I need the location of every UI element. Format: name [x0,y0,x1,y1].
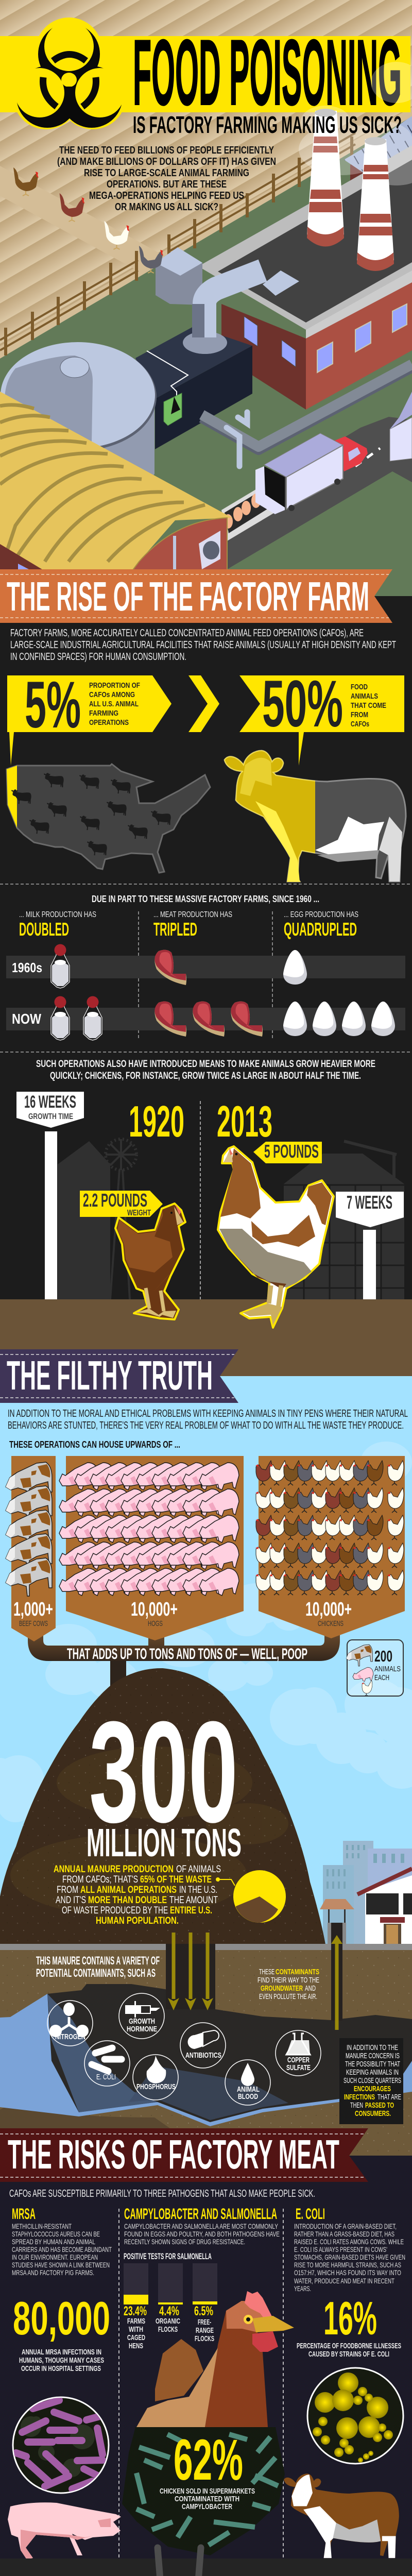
text: annual manure production: 65% OF THE WASTE [140,1874,212,1885]
text: these operations: THESE OPERATIONS CAN HOUSE UPWARDS OF ... [9,1439,180,1450]
bar chart: positive tests for salmonella: FLOCKS [158,2325,178,2334]
bar chart: positive tests for salmonella: 6.5% [194,2304,213,2318]
callout: 50 percent: THAT COME [351,701,386,710]
callout: 50 percent: 50% [262,667,343,741]
column: MRSA: 80,000 [13,2293,110,2345]
smokestack two [357,137,394,271]
icon: e. coli: E. COLI [96,2073,116,2081]
bar chart: positive tests for salmonella: FLOCKS [195,2334,214,2343]
text: annual manure production: ENTIRE U.S. [170,1905,212,1916]
section background: risks [0,2156,412,2576]
text: groundwater note: FIND THEIR WAY TO THE [258,1976,319,1985]
icon: antibiotics: ANTIBIOTICS [185,2051,221,2060]
intro text: RISE TO LARGE-SCALE ANIMAL FARMING [84,167,249,179]
text: 62 percent stat [160,2428,255,2511]
icon: nitrogen: NITROGEN [55,2032,85,2041]
panel: chickens: 10,000+ [305,1599,352,1620]
barn end wall [131,518,227,572]
yellow arch roof [0,392,232,572]
illustration: hen with campylobacter [136,2291,294,2427]
microscope: MRSA bacteria [13,2397,109,2493]
bar chart: positive tests for salmonella: HENS [129,2342,143,2350]
sky bokeh [0,1442,412,1822]
heading: years [129,1097,272,1146]
icon: phosphorus [133,2055,178,2100]
tag: 2.2 pounds weight: 2.2 POUNDS [83,1190,147,1211]
legend: 200 animals each: 200 [374,1647,392,1665]
bar chart: positive tests for salmonella: POSITIVE TESTS FOR SALMONELLA [124,2251,212,2261]
column: MRSA [12,2206,112,2373]
bar chart: positive tests for salmonella: 4.4% [159,2304,179,2318]
column: e. coli: E. COLI [296,2206,325,2223]
text: annual manure production: AND IT'S [56,1895,86,1906]
sign: 16 weeks growth time: GROWTH TIME [28,1112,73,1121]
text: annual manure production: THE AMOUNT [169,1895,218,1906]
text: annual manure production: OF WASTE PRODUCED BY THE [62,1905,168,1916]
intro text [57,145,276,213]
icon: growth hormone [119,1993,164,2039]
sign: 16 weeks growth time [16,1092,84,1299]
text: annual manure production [54,1864,221,1926]
text: annual manure production: OF ANIMALS [176,1864,221,1875]
callout: infection note [339,2038,403,2124]
illustration: large 2013 chicken [218,1146,334,1328]
illustration: well [320,1899,354,1944]
rear barn [350,129,412,258]
text: groundwater note: GROUNDWATER [261,1984,303,1993]
microscope: e. coli [307,2368,403,2464]
factory walls [306,281,412,410]
panel: chickens: CHICKENS [318,1619,344,1628]
stat: 300 million tons: 300 [89,1692,238,1853]
tag: 5 pounds: 5 POUNDS [264,1141,319,1162]
panel: hogs: HOGS [148,1619,163,1628]
chart: production pictograms: NOW [12,1011,41,1027]
intro text: OPERATIONS. BUT ARE THESE [107,179,227,190]
text: groundwater note: AND [305,1984,316,1993]
column: e. coli: YEARS. [294,2284,311,2293]
callout: 50 percent [239,667,404,766]
arrow: chevron [188,675,219,732]
banner: the filthy truth: THE FILTHY TRUTH [7,1352,213,1398]
callout: 50 percent: FROM [351,710,368,719]
sign: 16 weeks growth time: 16 WEEKS [24,1092,76,1112]
dashed column dividers [119,2209,283,2558]
icon: phosphorus: PHOSPHORUS [136,2082,176,2091]
icon: nitrogen [47,2001,93,2046]
icon: growth hormone: HORMONE [127,2025,157,2033]
text: filthy truth intro [8,1408,408,1431]
pipes: waste flow [28,1633,340,1689]
dashed divider 1920 vs 2013 [200,1101,201,1320]
tag: 2.2 pounds weight [80,1190,163,1217]
callout: 5 percent: OPERATIONS [89,718,129,727]
legend: 200 animals each [346,1640,403,1696]
callout: 5 percent: CAFOs AMONG [89,690,135,699]
text: 62 percent stat: CONTAMINATED WITH [175,2495,239,2503]
icon: antibiotics [180,2023,226,2068]
illustration: factory farm top [0,62,412,572]
map: United States with cows [7,764,210,873]
water table [0,1994,412,2126]
chart: production pictograms: QUADRUPLED [284,919,357,940]
delivery truck red [335,436,368,471]
callout: infection note: PASSED TO [365,2101,394,2110]
callout: 5 percent [7,668,171,766]
heading: years: 2013 [217,1097,272,1146]
icon: e. coli [84,2041,130,2086]
conveyor with packaged chickens [221,479,283,541]
tag: 5 pounds [253,1141,322,1163]
icon: copper sulfate: SULFATE [286,2063,311,2072]
icon: biohazard symbol [13,18,126,129]
chart: 65 percent pie [216,1870,286,1923]
column: MRSA: CARRIERS AND HAS BECOME ABUNDANT [12,2245,112,2253]
bar chart: positive tests for salmonella: RANGE [196,2326,214,2335]
silver pipe [183,331,227,354]
intro text: THE NEED TO FEED BILLIONS OF PEOPLE EFFICIENTLY [59,145,274,156]
panel: beef cows: BEEF COWS [19,1619,48,1628]
bar chart: positive tests for salmonella: FREE- [198,2318,211,2327]
column: MRSA: STAPHYLOCOCCUS AUREUS CAN BE [12,2230,100,2238]
illustration: pig [8,2502,121,2560]
stat: 300 million tons [87,1692,242,1865]
text: manure contaminants: THIS MANURE CONTAINS A VARIETY OF [36,1954,160,1967]
sign: 7 weeks [336,1192,404,1299]
text: CAFO definition: IN CONFINED SPACES) FOR HUMAN CONSUMPTION. [10,651,186,663]
text: CAFO definition [10,628,396,663]
second truck [390,417,412,461]
illustration: half yellow cow [225,751,406,882]
text: 62 percent stat: 62% [174,2428,243,2492]
column: MRSA: SPREAD BY HUMAN AND ANIMAL [12,2238,95,2246]
panel: hogs: 10,000+ [131,1599,178,1620]
background: farm ground [0,0,412,596]
callout: 50 percent: CAFOs [351,720,369,728]
text: annual manure production: IN THE U.S. [179,1885,217,1895]
callout: infection note: THEN [350,2101,363,2110]
section: soil [0,1944,412,2156]
panel: beef cows: 1,000+ [13,1599,53,1620]
callout: 5 percent: 5% [25,668,81,742]
chart: production pictograms: ... MILK PRODUCTION HAS [19,910,96,919]
intro text: (AND MAKE BILLIONS OF DOLLARS OFF IT) HAS GIVEN [57,156,276,167]
column: MRSA: HUMANS, THOUGH MANY CASES [19,2356,104,2365]
intro text: MEGA-OPERATIONS HELPING FEED US [89,190,244,201]
callout: 50 percent: ANIMALS [351,692,378,701]
tag: 2.2 pounds weight: WEIGHT [127,1209,151,1217]
illustration: cow [284,2473,399,2558]
text: annual manure production: ALL ANIMAL OPERATIONS [80,1885,177,1895]
callout: infection note: ENCOURAGES [354,2084,391,2093]
bar chart: positive tests for salmonella: ORGANIC [156,2317,180,2326]
chart: production pictograms: ... MEAT PRODUCTION HAS [153,910,232,919]
text: annual manure production: HUMAN POPULATION. [96,1916,179,1926]
factory roof and trim [198,145,412,330]
farm silhouettes [58,1139,404,1299]
smokestack one [307,109,344,246]
column: campylobacter and salmonella: FOUND IN EGGS AND POULTRY, AND BOTH PATHOGENS HAVE [124,2230,280,2238]
column: MRSA: OCCUR IN HOSPITAL SETTINGS [21,2364,101,2373]
small pipes [227,412,247,466]
panel: beef cows [6,1456,56,1641]
column: MRSA: IN OUR ENVIRONMENT. EUROPEAN [12,2253,98,2261]
intro text: OR MAKING US ALL SICK? [115,201,218,213]
column: MRSA: MRSA AND FACTORY PIG FARMS. [12,2268,94,2277]
control box [135,326,252,399]
callout: infection note: CONSUMERS. [355,2109,391,2118]
column: MRSA: STUDIES HAVE SHOWN A LINK BETWEEN [12,2261,110,2269]
bar chart: positive tests for salmonella: FARMS [127,2317,145,2326]
callout: 5 percent: PROPORTION OF [89,681,140,690]
text: groundwater note [258,1968,319,2001]
chimney smoke [299,62,412,185]
callout: 5 percent: FARMING [89,709,118,718]
icon: growth hormone: GROWTH [129,2017,155,2026]
chart: production pictograms: TRIPLED [153,919,197,940]
icon: animal blood: BLOOD [238,2092,258,2101]
icon: copper sulfate: COPPER [287,2056,310,2064]
banner: title band [0,36,410,112]
icon: animal blood: ANIMAL [237,2085,260,2094]
bar chart: positive tests for salmonella: WITH [129,2325,143,2334]
text: groundwater note: THESE [259,1968,274,1976]
illustration: small 1920 chicken [115,1204,185,1319]
bar chart: positive tests for salmonella: CAGED [127,2333,145,2342]
legend: 200 animals each: EACH [374,1673,389,1682]
text: due in part: DUE IN PART TO THESE MASSIVE FACTORY FARMS, SINCE 1960 ... [92,894,319,904]
section background: sky [0,1376,412,1950]
legend: 200 animals each: ANIMALS [374,1665,401,1673]
column: MRSA: METHICILLIN-RESISTANT [12,2222,72,2230]
stat: 300 million tons: MILLION TONS [87,1821,242,1865]
column: campylobacter and salmonella [124,2206,280,2246]
chart: production pictograms: DOUBLED [19,919,69,940]
ground [0,1299,412,1376]
text: annual manure production: FROM CAFOs; THAT'S [62,1874,138,1885]
illustration: city and house [323,1841,412,1949]
column: campylobacter and salmonella: CAMPYLOBACTER AND SALMONELLA ARE MOST COMMONLY [124,2222,278,2230]
text: annual manure production: MORE THAN DOUBLE [88,1895,167,1906]
text: manure contaminants: POTENTIAL CONTAMINANTS, SUCH AS [36,1967,156,1979]
silo [0,392,154,515]
contaminant plume [47,1984,412,2122]
text: manure contaminants [36,1954,160,1979]
text: groundwater note: CONTAMINANTS [276,1968,319,1976]
panel: chickens [255,1456,405,1638]
text: annual manure production: ANNUAL MANURE PRODUCTION [54,1864,174,1875]
grey pipe [202,367,412,449]
shaft: contaminants entering groundwater [166,1923,342,2030]
panel: hogs [59,1456,244,1640]
text: annual manure production: FROM [57,1885,78,1895]
road [223,417,412,569]
microscope: campylobacter body [122,2427,285,2555]
wire and green electrical box [147,351,188,397]
bar chart: positive tests for salmonella [124,2251,217,2350]
column: campylobacter and salmonella: CAMPYLOBACTER AND SALMONELLA [124,2206,277,2223]
callout: 5 percent: ALL U.S. ANIMAL [89,700,139,708]
floor band with hen legs [0,2548,412,2576]
text: groundwater note: EVEN POLLUTE THE AIR. [259,1992,317,2001]
heading: years: 1920 [129,1097,184,1146]
column: MRSA: ANNUAL MRSA INFECTIONS IN [22,2348,101,2357]
duct [156,247,202,305]
callout: infection note: INFECTIONS [344,2093,375,2102]
text: such operations [36,1059,375,1081]
chart: production pictograms: 1960s [12,960,42,975]
chart: production pictograms [0,884,412,1052]
icon: chickens walking [13,167,163,273]
section background: rise of factory farm [0,596,412,1299]
icon: animal blood [225,2060,270,2105]
column: e. coli [294,2206,405,2359]
column: MRSA: MRSA [12,2206,36,2223]
bar chart: positive tests for salmonella: 23.4% [124,2304,147,2318]
fence [0,133,355,355]
text: 62 percent stat: CHICKEN SOLD IN SUPERMARKETS [160,2487,255,2496]
chart: production pictograms: ... EGG PRODUCTION HAS [284,910,358,919]
column: campylobacter and salmonella: RECENTLY SHOWN SIGNS OF DRUG RESISTANCE. [124,2238,245,2246]
illustration: manure heap [0,1668,325,1944]
banner: the filthy truth [0,1349,238,1403]
text: 62 percent stat: CAMPYLOBACTER [182,2502,232,2511]
icon: copper sulfate [276,2030,321,2076]
callout: 50 percent: FOOD [351,683,368,691]
